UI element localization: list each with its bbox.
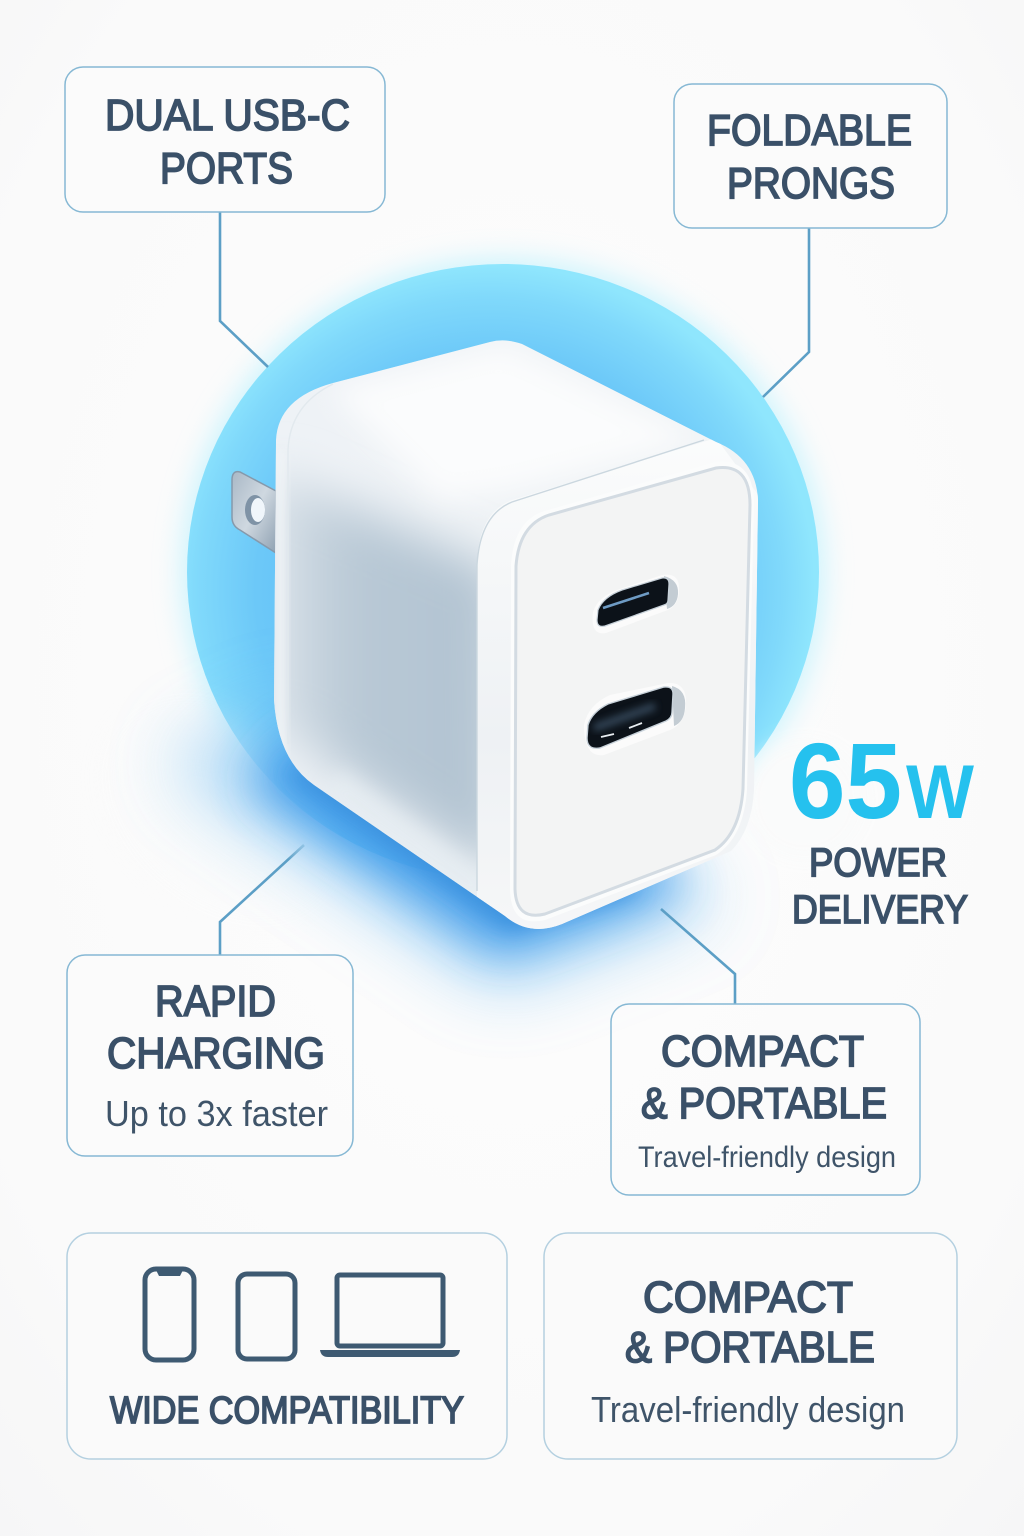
heading line 2: & PORTABLE <box>625 1323 875 1372</box>
heading line 1: DUAL USB-C <box>105 91 350 140</box>
heading line 1: RAPID <box>155 977 276 1026</box>
side face shading <box>270 345 762 940</box>
subtext: Travel-friendly design <box>591 1389 905 1430</box>
front raised ring <box>510 462 754 921</box>
panel: compact and portable <box>544 1233 957 1459</box>
label line 1: POWER <box>809 841 947 885</box>
subtext: Up to 3x faster <box>105 1093 328 1134</box>
body silhouette <box>274 340 758 929</box>
label line 2: DELIVERY <box>792 888 968 932</box>
callout: dual USB-C ports <box>65 67 385 212</box>
heading line 2: & PORTABLE <box>641 1079 887 1128</box>
port: lower USB-C <box>584 683 686 755</box>
callout box <box>611 1004 920 1195</box>
callout box <box>65 67 385 212</box>
icon: laptop <box>320 1275 460 1357</box>
panel box <box>67 1233 507 1459</box>
panel label: WIDE COMPATIBILITY <box>110 1390 464 1432</box>
icon: metal prong <box>232 472 276 553</box>
callout: compact and portable <box>611 1004 920 1195</box>
connector: dual USB-C <box>220 212 268 367</box>
charger body <box>270 340 762 940</box>
connector: compact and portable <box>661 909 735 1004</box>
callout: foldable prongs <box>674 84 947 228</box>
heading line 1: COMPACT <box>661 1027 864 1076</box>
connector: foldable prongs <box>763 228 809 397</box>
blue floor shadow under charger <box>170 700 720 985</box>
icon: tablet <box>238 1274 295 1359</box>
panel box <box>544 1233 957 1459</box>
wattage number: 65 <box>789 720 902 841</box>
icon: phone <box>145 1268 194 1360</box>
heading line 2: PORTS <box>160 144 293 193</box>
left seam <box>288 384 333 744</box>
panel: wide compatibility <box>67 1233 507 1459</box>
wattage unit: W <box>906 750 974 835</box>
stat: 65W power delivery <box>789 720 974 932</box>
heading line 1: COMPACT <box>643 1273 853 1322</box>
front panel <box>519 472 746 911</box>
callout: rapid charging <box>67 955 353 1156</box>
callout box <box>67 955 353 1156</box>
heading line 2: CHARGING <box>107 1029 325 1078</box>
connector: rapid charging <box>220 845 304 955</box>
side seam <box>477 440 704 891</box>
port: upper USB-C <box>593 575 679 633</box>
heading line 1: FOLDABLE <box>707 106 912 155</box>
callout box <box>674 84 947 228</box>
glowing blue circle behind charger <box>103 259 865 927</box>
subtext: Travel-friendly design <box>638 1141 896 1174</box>
heading line 2: PRONGS <box>727 159 895 208</box>
